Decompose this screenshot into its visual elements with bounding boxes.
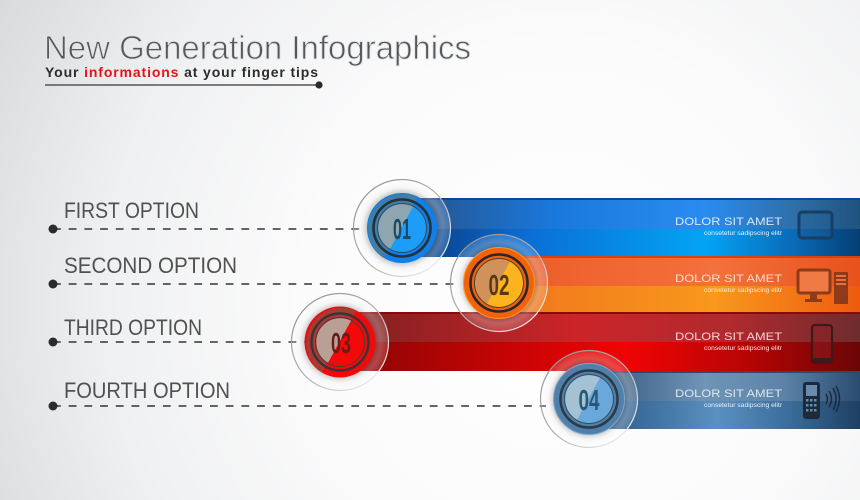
- option 2 label and leader: SECOND OPTION: [64, 253, 237, 278]
- icon: mobile phone with signal: [803, 382, 840, 419]
- icon: tablet: [799, 212, 832, 238]
- band 2 caption: consetetur sadipscing elitr: [704, 287, 782, 294]
- option 4 label and leader: FOURTH OPTION: [64, 378, 230, 403]
- option 3 label and leader: THIRD OPTION: [64, 315, 202, 340]
- icon: desktop computer: [798, 270, 848, 304]
- subtitle: Your informations at your finger tips: [45, 64, 318, 80]
- band 2 caption: [675, 273, 782, 294]
- band 2 caption: DOLOR SIT AMET: [675, 273, 782, 285]
- badge 02: [450, 234, 548, 332]
- option 2 label and leader: [48, 253, 458, 288]
- option 3 label and leader: [48, 315, 305, 346]
- icon: smartphone: [812, 325, 832, 363]
- badge 02: 02: [488, 270, 510, 302]
- option 1 label and leader: FIRST OPTION: [64, 198, 199, 223]
- subtitle underline with dot: [45, 81, 323, 89]
- band: third option: [340, 312, 860, 371]
- badge 04: 04: [578, 385, 600, 417]
- band 4 caption: [675, 388, 782, 409]
- band 3 caption: [675, 331, 782, 352]
- band 4 caption: DOLOR SIT AMET: [675, 388, 782, 400]
- band 3 caption: consetetur sadipscing elitr: [704, 345, 782, 352]
- band 4 caption: consetetur sadipscing elitr: [704, 402, 782, 409]
- band 3 caption: DOLOR SIT AMET: [675, 331, 782, 343]
- badge 01: 01: [393, 214, 411, 246]
- badge 03: 03: [331, 328, 351, 360]
- badge 03: [292, 294, 388, 390]
- band: fourth option: [600, 371, 860, 429]
- band: first option: [420, 198, 860, 257]
- option 1 label and leader: [48, 198, 360, 234]
- badge 01: [354, 180, 450, 276]
- option 4 label and leader: [48, 378, 546, 410]
- band 1 caption: DOLOR SIT AMET: [675, 216, 782, 228]
- band: second option: [500, 256, 860, 314]
- band 1 caption: consetetur sadipscing elitr: [704, 230, 782, 237]
- title: New Generation Infographics: [44, 29, 471, 66]
- band 1 caption: [675, 216, 782, 237]
- badge 04: [540, 350, 638, 448]
